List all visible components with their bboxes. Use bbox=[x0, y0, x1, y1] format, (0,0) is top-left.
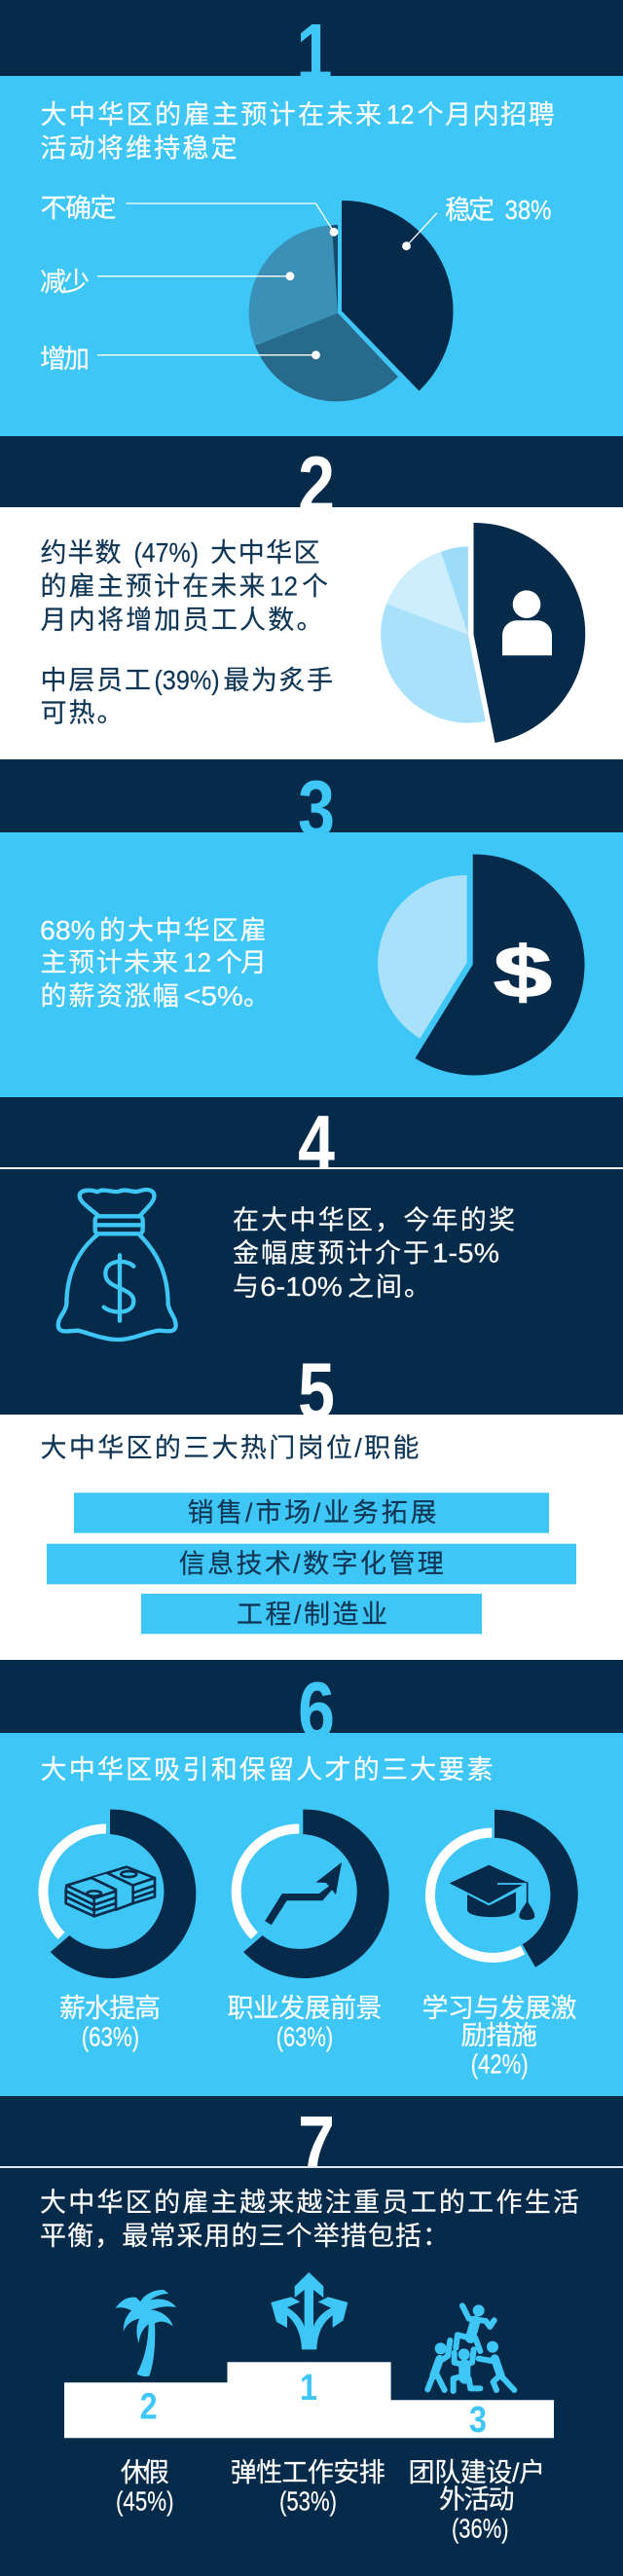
body text: 中层员工 bbox=[41, 666, 151, 695]
label: increase: 增加 bbox=[40, 345, 90, 374]
label: career: 职业发展前景 bbox=[228, 1994, 382, 2023]
donut: career prospects 63% bbox=[237, 1810, 389, 1978]
label: uncertain: 不确定 bbox=[41, 194, 117, 223]
section 5 bbox=[0, 1346, 623, 1660]
icon: money bag bbox=[58, 1190, 176, 1340]
bar: IT bbox=[47, 1544, 576, 1584]
label: flexible work: (53%) bbox=[279, 2486, 337, 2516]
bar: sales bbox=[74, 1492, 549, 1533]
number 3: 3 bbox=[298, 764, 335, 855]
label: salary: 薪水提高 bbox=[59, 1994, 161, 2023]
body text: 的薪资涨幅 bbox=[41, 981, 179, 1011]
label: learning: (42%) bbox=[471, 2048, 529, 2079]
icon: person bbox=[502, 590, 552, 655]
icon: rising arrow bbox=[265, 1862, 342, 1925]
section 6 bbox=[0, 1660, 623, 2096]
number 1: 1 bbox=[297, 7, 332, 97]
body text: 主预计未来 bbox=[41, 948, 178, 977]
body text: 可热。 bbox=[41, 699, 123, 728]
bar: sales: 销售/市场/业务拓展 bbox=[187, 1498, 436, 1527]
donut: learning 42% bbox=[430, 1810, 578, 1968]
body text: 之间。 bbox=[348, 1272, 430, 1302]
label: learning bbox=[422, 1994, 576, 2079]
section 7 bbox=[0, 2096, 623, 2576]
bar: engineering: 工程/制造业 bbox=[237, 1601, 387, 1630]
icon: palm tree bbox=[116, 2290, 176, 2376]
label: salary bbox=[59, 1994, 161, 2052]
label: flexible work bbox=[231, 2458, 385, 2516]
section 2 bbox=[0, 436, 623, 759]
pie chart: hiring activity bbox=[249, 201, 454, 401]
label: vacation: 休假 bbox=[121, 2458, 169, 2487]
label: stable 38% bbox=[402, 195, 551, 250]
body text: 在大中华区，今年的奖 bbox=[233, 1205, 515, 1234]
podium: 3 bbox=[469, 2400, 487, 2441]
heading bbox=[40, 2189, 579, 2251]
heading: 大中华区的雇主预计在未来 bbox=[41, 100, 382, 129]
body text: 最为炙手 bbox=[223, 666, 333, 695]
bar: IT: 信息技术/数字化管理 bbox=[179, 1550, 444, 1579]
body text: 12 bbox=[270, 570, 298, 602]
body text: 6-10% bbox=[260, 1271, 343, 1302]
body text: 约半数 bbox=[41, 538, 121, 568]
donut: salary 63% bbox=[43, 1810, 196, 1978]
number 4: 4 bbox=[298, 1099, 335, 1190]
label: career: (63%) bbox=[276, 2021, 333, 2052]
label: stable 38%: 38% bbox=[504, 195, 551, 225]
icon: dollar sign: $ bbox=[494, 932, 552, 1012]
label: decrease: 减少 bbox=[40, 268, 90, 297]
section 3 bbox=[0, 759, 623, 1097]
label: team building: 外活动 bbox=[439, 2484, 514, 2514]
heading: 个月内招聘 bbox=[418, 100, 555, 129]
body text: 个 bbox=[302, 572, 328, 602]
number 5: 5 bbox=[298, 1346, 335, 1437]
body text: 的雇主预计在未来 bbox=[41, 572, 265, 602]
body text bbox=[41, 537, 333, 728]
icon: team pyramid bbox=[427, 2304, 514, 2391]
heading: 平衡，最常采用的三个举措包括： bbox=[40, 2222, 449, 2251]
body text: (47%) bbox=[134, 537, 199, 568]
section 4 bbox=[0, 1097, 623, 1415]
label: team building: (36%) bbox=[452, 2514, 508, 2543]
body text: 的大中华区雇 bbox=[99, 916, 267, 945]
body text: 68% bbox=[40, 915, 95, 945]
icon: three-way arrows bbox=[271, 2272, 348, 2349]
heading: 大中华区的雇主越来越注重员工的工作生活 bbox=[40, 2189, 579, 2218]
label: uncertain bbox=[41, 194, 338, 237]
label: salary: (63%) bbox=[82, 2021, 139, 2052]
number 2: 2 bbox=[298, 440, 335, 531]
podium bbox=[64, 2362, 554, 2441]
label: team building: 团队建设/户 bbox=[409, 2458, 545, 2487]
body text: 大中华区 bbox=[210, 538, 320, 568]
heading: 12 bbox=[386, 99, 415, 129]
body text: 与 bbox=[233, 1272, 259, 1302]
body text: 金幅度预计介于 bbox=[233, 1238, 429, 1268]
heading: 活动将维持稳定 bbox=[41, 134, 238, 164]
pie chart: salary bbox=[378, 854, 585, 1075]
body text: 12 bbox=[183, 947, 211, 977]
heading bbox=[41, 99, 555, 164]
label: learning: 励措施 bbox=[461, 2021, 537, 2050]
podium: 2 bbox=[140, 2386, 158, 2427]
body text: 1-5% bbox=[432, 1238, 499, 1268]
label: career bbox=[228, 1994, 382, 2052]
label: stable 38%: 稳定 bbox=[445, 196, 495, 225]
label: learning: 学习与发展激 bbox=[422, 1994, 576, 2023]
label: team building bbox=[409, 2458, 545, 2543]
bar: engineering bbox=[141, 1594, 482, 1634]
number 7: 7 bbox=[298, 2100, 335, 2190]
heading: 大中华区吸引和保留人才的三大要素 bbox=[41, 1755, 493, 1785]
body text bbox=[40, 915, 270, 1011]
body text: 月内将增加员工人数。 bbox=[41, 606, 323, 635]
body text: <5% bbox=[184, 981, 243, 1011]
number 6: 6 bbox=[298, 1666, 335, 1756]
label: decrease bbox=[40, 268, 294, 297]
label: vacation: (45%) bbox=[116, 2486, 173, 2516]
body text: (39%) bbox=[154, 665, 220, 695]
heading: 大中华区的三大热门岗位/职能 bbox=[41, 1433, 419, 1462]
body text: 。 bbox=[243, 981, 270, 1011]
icon: graduation cap bbox=[450, 1865, 534, 1920]
section 1 bbox=[0, 0, 623, 436]
podium: 1 bbox=[300, 2368, 317, 2409]
label: vacation bbox=[116, 2458, 173, 2516]
body text: 个月 bbox=[216, 948, 267, 977]
label: increase bbox=[40, 345, 320, 374]
pie chart: headcount bbox=[381, 523, 585, 743]
body text bbox=[233, 1205, 515, 1302]
icon: banknotes bbox=[66, 1867, 155, 1916]
label: flexible work: 弹性工作安排 bbox=[231, 2458, 385, 2487]
